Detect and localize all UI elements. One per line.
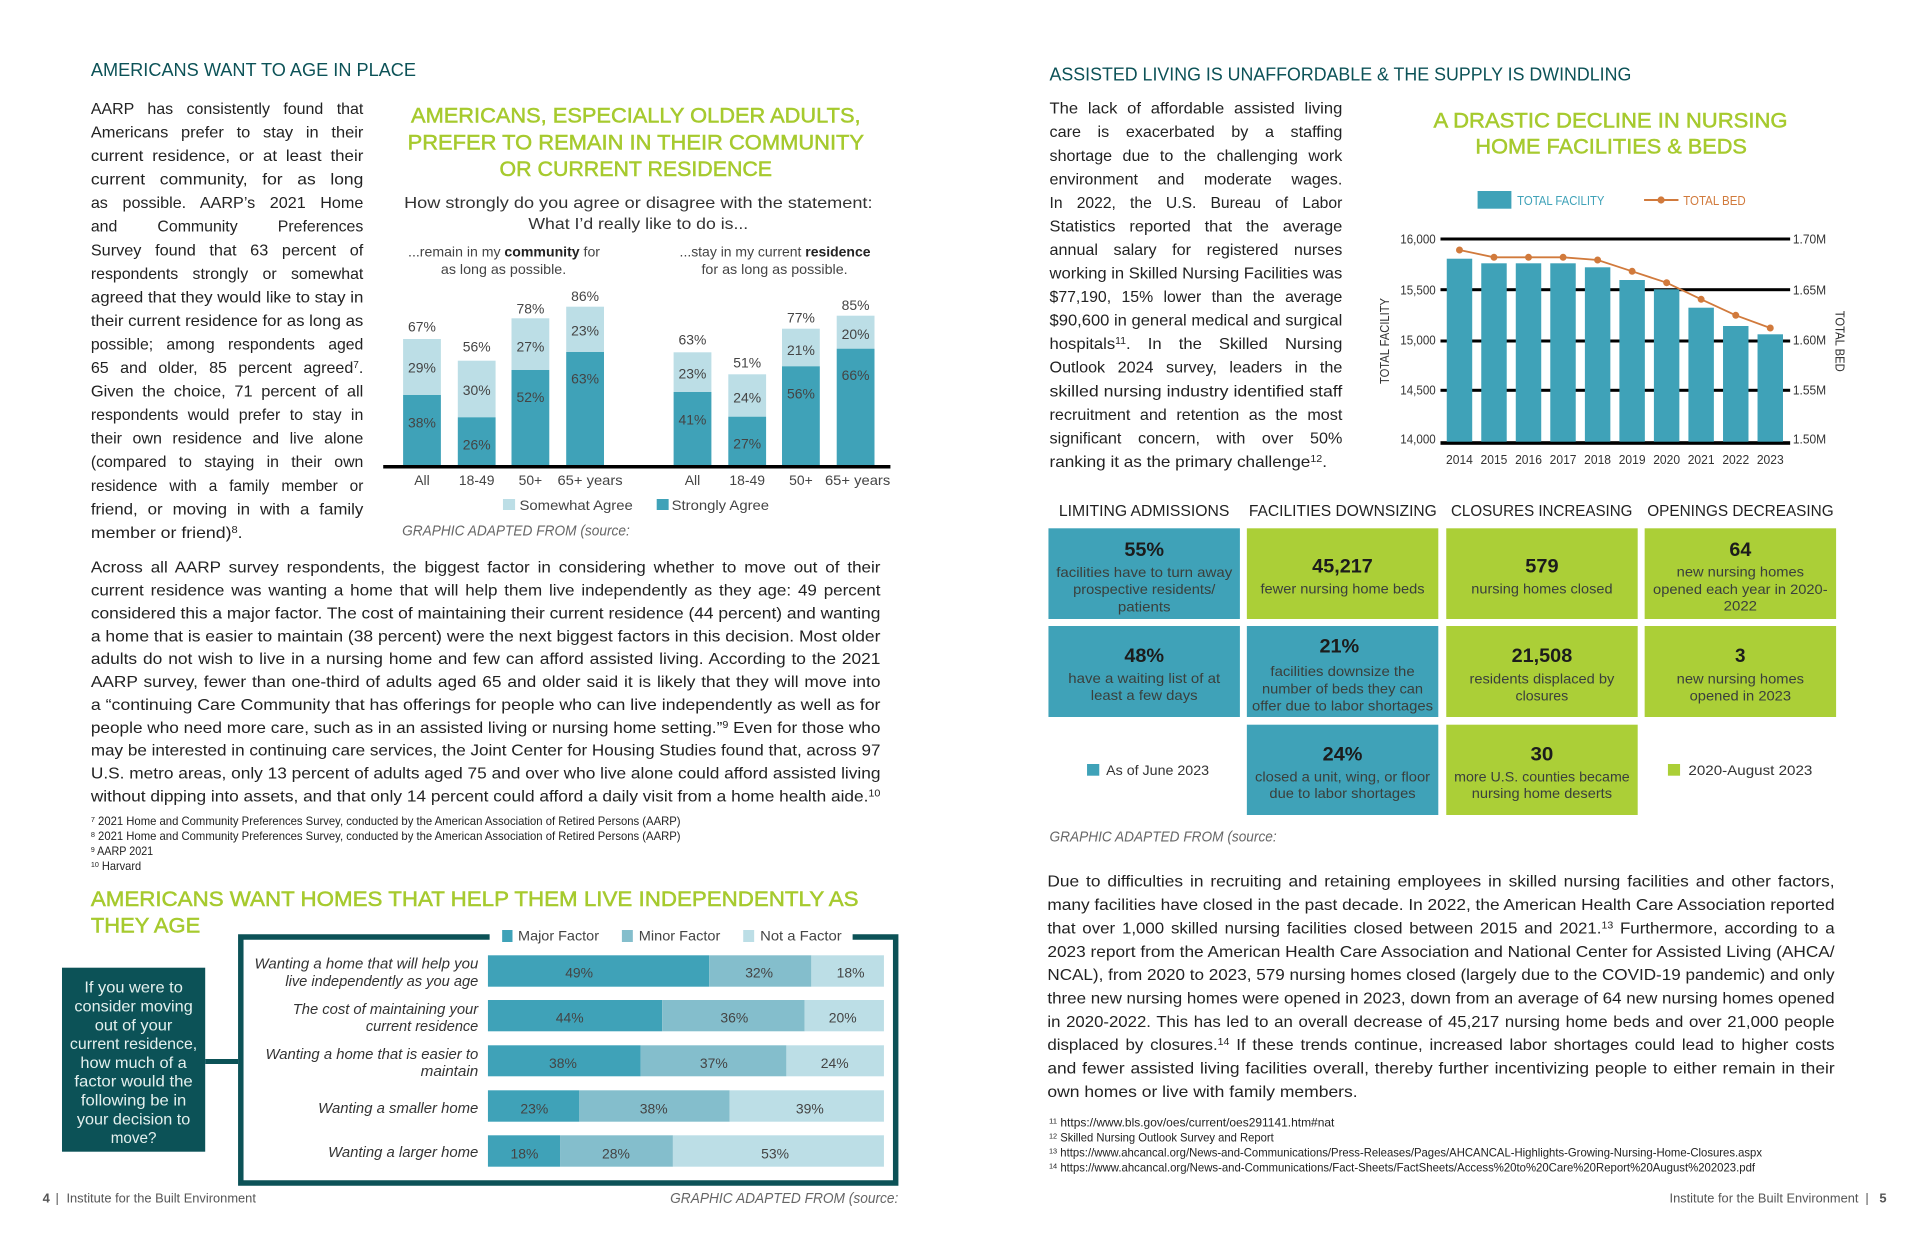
column headers: impact categories: FACILITIES DOWNSIZING [1249,503,1437,520]
text block: biggest factor paragraph: AARP survey, fewer than one-third of adults aged 65 and older said it is likely that they will move into [91,674,881,691]
callout: survey question box: factor would the [74,1074,193,1091]
text block: AARP intro paragraph: their own residence and live alone [91,431,363,448]
footnotes 7 to 10: AARP 2021 [95,846,153,858]
subheading: remain in my community [408,245,601,277]
footnotes 11 to 14 [1049,1116,1762,1174]
text block: closures paragraph: 13 [1601,920,1614,931]
combo chart: nursing facilities and beds: 2015 [1481,453,1507,467]
row: larger home [328,1135,884,1167]
subheading: remain in my community: as long as possible. [441,262,566,277]
row: larger home: 53% [761,1145,789,1161]
column headers: impact categories: OPENINGS DECREASING [1647,503,1834,520]
stacked bar chart: remain in community or residence: 63% [571,371,599,387]
stat card: 21%: number of beds they can [1262,680,1423,696]
text block: AARP intro paragraph: 8 [232,525,238,536]
text block: biggest factor paragraph: 10 [868,788,881,799]
text block: AARP intro paragraph: Survey found that 63 percent of [91,242,364,259]
footer: page 5: Institute for the Built Environment [1670,1191,1859,1206]
text block: staffing shortage paragraph: Outlook 2024 survey, leaders in the [1050,360,1342,377]
stat card: 21,508: closures [1516,687,1568,703]
stat card: 21%: 21% [1319,636,1359,657]
callout: survey question box [62,968,205,1152]
text block: staffing shortage paragraph: Statistics reported that the average [1050,218,1342,235]
stat card: 3: opened in 2023 [1690,687,1791,703]
text block: AARP intro paragraph: current residence, or at least their [91,148,364,165]
footnotes 11 to 14: 14 [1049,1161,1057,1170]
stat card: 48% [1048,626,1240,717]
stat card: 30: 30 [1530,745,1553,766]
text block: staffing shortage paragraph: significant concern, with over 50% [1050,430,1342,447]
text block: AARP intro paragraph: possible; among respondents aged [91,336,363,354]
text block: AARP intro paragraph: (compared to staying in their own [91,454,363,471]
callout: survey question box: following be in [81,1092,186,1110]
text block: closures paragraph: many facilities have closed in the past decade. In 2022, the American Health Care Association reported [1047,897,1835,914]
combo chart: nursing facilities and beds: 2022 [1722,453,1749,467]
footnotes 11 to 14: https://www.bls.gov/oes/current/oes291141.htm#nat [1057,1117,1335,1129]
survey question [404,195,873,233]
row: live independently: 49% [565,964,593,980]
text block: biggest factor paragraph: Across all AARP survey respondents, the biggest factor in considering whether to move out of their [91,560,881,577]
footer: page 4: | [56,1191,59,1206]
row: cost of maintaining [293,1000,884,1035]
footnotes 7 to 10 [91,815,681,873]
stacked bar chart: remain in community or residence: 78% [516,301,544,317]
subheading: stay in my current residence: ...stay in my current residence [680,245,871,260]
stacked bar chart: remain in community or residence: 24% [733,389,761,405]
combo chart: nursing facilities and beds: 14,000 [1400,432,1436,447]
stat card: 579: 579 [1525,556,1559,577]
stacked bar chart: remain in community or residence [383,288,890,488]
text block: closures paragraph: own homes or live with family members. [1047,1084,1358,1101]
legend: agreement: Somewhat Agree [519,497,633,513]
combo chart: nursing facilities and beds: 1.55M [1793,383,1826,398]
stat card: 55%: facilities have to turn away [1056,564,1232,580]
footnotes 7 to 10: 2021 Home and Community Preferences Survey, conducted by the American Association of Retired Persons (AARP) [95,816,681,828]
column headers: impact categories [1059,503,1834,520]
combo chart: nursing facilities and beds: 2016 [1515,453,1542,467]
text block: biggest factor paragraph: considered this a major factor. The cost of maintaining their current residence (44 percent) and wanting [91,605,880,622]
text block: staffing shortage paragraph: . [1322,454,1327,471]
text block: staffing shortage paragraph: working in Skilled Nursing Facilities was [1049,265,1342,283]
source note: chart 1: GRAPHIC ADAPTED FROM (source: [402,524,630,540]
combo chart: nursing facilities and beds: 1.65M [1793,283,1826,298]
chart title: homes that help them live independently: AMERICANS WANT HOMES THAT HELP THEM LIVE INDEPENDENTLY AS [91,888,859,911]
legend: total facility and total bed [1478,191,1746,209]
text block: closures paragraph: NCAL), from 2020 to 2023, 579 nursing homes closed (largely due to the COVID-19 pandemic) and only [1047,967,1835,984]
stacked bar chart: remain in community or residence: 56% [787,386,815,402]
stat card: 24%: closed a unit, wing, or floor [1255,768,1430,784]
footnotes 7 to 10: 10 [91,860,99,869]
heading: assisted living is unaffordable: ASSISTED LIVING IS UNAFFORDABLE & THE SUPPLY IS DWINDLING [1050,64,1631,85]
stacked bar chart: remain in community or residence: 50+ [789,472,813,488]
stacked bar chart: remain in community or residence: 18-49 [729,472,765,488]
text block: closures paragraph: Furthermore, according to a [1613,920,1835,937]
row: cost of maintaining: current residence [366,1019,478,1035]
text block: biggest factor paragraph: without dipping into assets, and that only 14 percent could afford a daily visit from a home health aide. [91,788,806,805]
stat card: 21,508 [1446,626,1638,717]
row: easier to maintain: Wanting a home that is easier to [265,1047,478,1063]
text block: staffing shortage paragraph: $77,190, 15% lower than the average [1050,289,1342,306]
footnotes 11 to 14: 11 [1049,1116,1057,1125]
text block: AARP intro paragraph: as possible. AARP’s 2021 Home [91,195,363,212]
callout: survey question box: your decision to [77,1111,190,1128]
stacked bar chart: remain in community or residence: 66% [842,367,870,383]
subheading: stay in my current residence [680,245,871,277]
text block: biggest factor paragraph: 9 [722,720,729,731]
stacked bar chart: remain in community or residence: 38% [408,414,436,430]
text block: AARP intro paragraph: current community, for as long [91,172,363,189]
text block: staffing shortage paragraph: skilled nursing industry identified staff [1050,383,1343,400]
text block: staffing shortage paragraph: environment and moderate wages. [1050,171,1342,188]
stat card: 24%: 24% [1323,745,1363,766]
stacked bar chart: remain in community or residence: 30% [463,382,491,398]
chart title: drastic decline [1434,109,1788,159]
row: smaller home: 23% [520,1100,548,1116]
text block: AARP intro paragraph: respondents strongly or somewhat [91,266,364,283]
stat card: 45,217 [1247,528,1438,619]
stat card: 24%: due to labor shortages [1269,785,1416,801]
stacked bar chart: remain in community or residence: 67% [408,319,436,335]
row: smaller home: 38% [640,1100,668,1116]
stat card: 21%: offer due to labor shortages [1252,697,1433,713]
text block: closures paragraph: three new nursing homes were opened in 2023, down from an average of 64 new nursing homes opened [1047,990,1835,1008]
text block: biggest factor paragraph: Even for those who [728,720,881,737]
text block: biggest factor paragraph: a home that is easier to maintain (38 percent) were the next biggest factors in this decision. Most older [91,628,881,645]
text block: AARP intro paragraph: AARP has consistently found that [91,101,364,118]
row: live independently [255,955,884,990]
legend: factor types: Not a Factor [760,927,842,944]
text block: closures paragraph [1047,874,1835,1101]
footnotes 7 to 10: 7 [91,815,95,824]
stat card: 55%: prospective residents/ [1073,581,1215,597]
callout: survey question box: out of your [95,1017,172,1034]
text block: closures paragraph: that over 1,000 skilled nursing facilities closed between 2015 and 2021. [1047,920,1569,937]
row: live independently: Wanting a home that will help you [255,957,478,973]
text block: AARP intro paragraph: agreed that they would like to stay in [91,289,363,306]
stacked bar chart: remain in community or residence: 27% [733,436,761,452]
text block: AARP intro paragraph: . [238,525,243,542]
chart title: prefer to remain: PREFER TO REMAIN IN THEIR COMMUNITY [408,131,864,154]
text block: closures paragraph: displaced by closures. [1047,1037,1208,1054]
row: cost of maintaining: 36% [720,1009,748,1025]
combo chart: nursing facilities and beds: 16,000 [1400,232,1436,247]
combo chart: nursing facilities and beds: 2023 [1757,453,1784,467]
combo chart: nursing facilities and beds [1378,232,1847,467]
text block: AARP intro paragraph [91,101,364,542]
text block: staffing shortage paragraph: The lack of affordable assisted living [1050,101,1342,118]
stacked bar chart: remain in community or residence: 23% [571,322,599,338]
survey question: What I’d really like to do is... [528,216,748,233]
text block: staffing shortage paragraph: ranking it as the primary challenge [1050,454,1292,471]
combo chart: nursing facilities and beds: 1.60M [1793,333,1826,348]
chart title: prefer to remain: AMERICANS, ESPECIALLY OLDER ADULTS, [411,105,861,128]
text block: closures paragraph: and fewer assisted living facilities overall, thereby further incentivizing people to either remain in their [1047,1061,1835,1078]
legend: agreement: Strongly Agree [672,497,769,513]
footnotes 11 to 14: https://www.ahcancal.org/News-and-Communications/Fact-Sheets/FactSheets/Access%20to%20Care%20Report%20August%202023.pdf [1057,1162,1756,1174]
text block: AARP intro paragraph: 65 and older, 85 percent agreed [91,360,351,377]
legend: factor types: Minor Factor [639,927,721,944]
combo chart: nursing facilities and beds: 2014 [1446,453,1473,467]
stat card: 64: 2022 [1724,598,1757,614]
combo chart: nursing facilities and beds: 2019 [1619,453,1646,467]
stat card: 55% [1048,528,1240,619]
combo chart: nursing facilities and beds: 2018 [1584,453,1611,467]
row: larger home: Wanting a larger home [328,1145,478,1161]
row: larger home: 28% [602,1145,630,1161]
row: smaller home: 39% [796,1100,824,1116]
panel frame: factors chart [241,937,896,1183]
combo chart: nursing facilities and beds: 2020 [1653,453,1680,467]
stat card: 45,217: fewer nursing home beds [1260,581,1425,597]
subheading: remain in my community: ...remain in my community for [408,245,601,260]
text block: closures paragraph: in 2020-2022. This has led to an overall decrease of 45,217 nursing home beds and over 21,000 people [1047,1014,1835,1031]
legend: total facility and total bed: TOTAL BED [1683,193,1746,208]
footer: page 5: 5 [1879,1191,1887,1206]
stat card: 21,508: 21,508 [1512,646,1572,667]
stacked bar chart: remain in community or residence: 56% [463,339,491,355]
row: smaller home [318,1090,884,1122]
callout: survey question box: move? [111,1130,157,1147]
row: easier to maintain: 38% [549,1055,577,1071]
combo chart: nursing facilities and beds: 2017 [1550,453,1577,467]
stacked bar chart: remain in community or residence: 50+ [519,472,542,488]
footnotes 7 to 10: 9 [91,845,95,854]
stat card: 21% [1247,626,1438,717]
text block: closures paragraph: 14 [1218,1037,1230,1048]
text block: AARP intro paragraph: their current residence for as long as [91,313,363,330]
text block: AARP intro paragraph: member or friend) [91,525,217,542]
text block: biggest factor paragraph: may be interested in continuing care services, the Joint Center for Housing Studies found that, across 97 [91,743,881,760]
text block: staffing shortage paragraph: $90,600 in general medical and surgical [1050,313,1342,330]
stat card: 30: nursing home deserts [1472,785,1612,801]
footnotes 7 to 10: 8 [91,830,95,839]
row: easier to maintain: maintain [421,1064,478,1080]
footer: page 4: 4 [43,1191,51,1206]
footnotes 11 to 14: Skilled Nursing Outlook Survey and Report [1057,1132,1275,1144]
stacked bar chart: remain in community or residence: 85% [842,297,870,313]
row: live independently: 32% [745,964,773,980]
combo chart: nursing facilities and beds: 15,500 [1400,283,1436,298]
stacked bar chart: remain in community or residence: All [685,472,700,488]
combo chart: nursing facilities and beds: 1.50M [1793,432,1826,447]
legend: factor types: Major Factor [518,927,599,944]
text block: staffing shortage paragraph: In 2022, the U.S. Bureau of Labor [1050,195,1343,212]
chart title: drastic decline: A DRASTIC DECLINE IN NURSING [1434,109,1788,132]
column headers: impact categories: CLOSURES INCREASING [1451,503,1632,520]
combo chart: nursing facilities and beds: 1.70M [1793,232,1826,247]
stat card: 48%: have a waiting list of at [1068,670,1220,686]
chart title: homes that help them live independently [91,888,859,938]
subheading: stay in my current residence: for as long as possible. [701,262,848,277]
column headers: impact categories: LIMITING ADMISSIONS [1059,503,1229,520]
text block: biggest factor paragraph: current residence was wanting a home that will help them live independently as they age: 49 percent [91,583,881,600]
combo chart: nursing facilities and beds: TOTAL FACILITY [1378,297,1392,384]
row: easier to maintain [265,1045,884,1080]
stat card: 21%: facilities downsize the [1270,663,1415,679]
stat card: 579 [1446,528,1638,619]
legend: total facility and total bed: TOTAL FACILITY [1517,193,1605,208]
callout: survey question box: If you were to [84,980,183,997]
stat card: 64: opened each year in 2020- [1653,581,1828,597]
stat card: 21,508: residents displaced by [1469,670,1614,686]
text block: closures paragraph: Due to difficulties in recruiting and retaining employees in skilled nursing facilities and other factors, [1047,874,1835,891]
source note: factors chart: GRAPHIC ADAPTED FROM (source: [670,1191,898,1207]
stacked bar chart: remain in community or residence: 77% [787,310,815,326]
text block: staffing shortage paragraph: 11 [1115,336,1126,347]
row: smaller home: Wanting a smaller home [318,1101,478,1117]
legend: factor types [502,927,842,944]
stacked bar chart: remain in community or residence: 27% [516,338,544,354]
stat card: 48%: least a few days [1091,687,1198,703]
text block: closures paragraph: 2023 report from the American Health Care Association and National Center for Assisted Living (AHCA/ [1047,944,1835,961]
text block: AARP intro paragraph: residence with a family member or [91,478,364,495]
row: easier to maintain: 24% [821,1055,849,1071]
stat card: 30: more U.S. counties became [1454,768,1630,784]
legend: agreement [503,497,769,513]
text block: biggest factor paragraph [90,560,881,805]
panel: right page [1047,64,1887,1206]
combo chart: nursing facilities and beds: 2021 [1688,453,1715,467]
footnotes 7 to 10: Harvard [99,861,141,873]
stacked bar chart: remain in community or residence: 52% [516,389,544,405]
text block: staffing shortage paragraph [1049,101,1343,471]
stacked bar chart: remain in community or residence: 63% [679,332,706,348]
text block: biggest factor paragraph: U.S. metro areas, only 13 percent of adults aged 75 and over who live alone could afford assisted living [91,765,880,783]
stat card: 3: 3 [1735,646,1746,667]
stat card: 64: new nursing homes [1677,564,1804,580]
stat card: 64: 64 [1729,540,1752,561]
row: live independently: 18% [837,964,865,980]
stacked bar chart: remain in community or residence: 21% [787,342,815,358]
stat card: 579: nursing homes closed [1471,581,1613,597]
stat card: 3 [1645,626,1836,717]
stacked bar chart: remain in community or residence: 86% [571,288,599,304]
stacked bar chart: remain in community or residence: 23% [679,366,706,382]
stacked bar chart: remain in community or residence: 18-49 [459,472,495,488]
combo chart: nursing facilities and beds: TOTAL BED [1833,311,1847,372]
chart title: drastic decline: HOME FACILITIES & BEDS [1475,136,1747,159]
text block: AARP intro paragraph: 7 [353,360,359,371]
row: cost of maintaining: 20% [829,1009,857,1025]
row: cost of maintaining: 44% [556,1009,584,1025]
text block: AARP intro paragraph: respondents would prefer to stay in [91,407,363,424]
footnotes 11 to 14: 12 [1049,1131,1057,1140]
text block: staffing shortage paragraph: shortage due to the challenging work [1050,148,1342,165]
text block: staffing shortage paragraph: 12 [1310,454,1323,465]
text block: biggest factor paragraph: adults do not wish to live in a nursing home and few can afford assisted living. According to the 2021 [91,651,881,668]
legend: 2020-August 2023: 2020-August 2023 [1688,762,1813,778]
stat card: 3: new nursing homes [1677,670,1804,686]
text block: staffing shortage paragraph: hospitals [1050,336,1112,353]
footnotes 11 to 14: https://www.ahcancal.org/News-and-Communications/Press-Releases/Pages/AHCANCAL-Highlights-Growing-Nursing-Home-Closures.aspx [1057,1147,1762,1159]
callout: survey question box: current residence, [70,1036,197,1053]
source note: stat cards: GRAPHIC ADAPTED FROM (source: [1050,830,1277,846]
stat card: 55%: patients [1118,598,1171,614]
legend: as of June 2023: As of June 2023 [1106,762,1209,778]
text block: AARP intro paragraph: friend, or moving in with a family [91,501,363,518]
row: live independently: live independently as you age [285,974,478,990]
stat card: 55%: 55% [1124,540,1164,561]
row: larger home: 18% [511,1145,538,1161]
stacked bar chart: remain in community or residence: 29% [408,359,436,375]
text block: AARP intro paragraph: Given the choice, 71 percent of all [91,384,363,401]
stat card: 24% [1247,725,1438,815]
text block: biggest factor paragraph: a “continuing Care Community that has offerings for people who can live independently as well as for [91,697,881,714]
text block: staffing shortage paragraph: . In the Skilled Nursing [1126,336,1342,353]
footnotes 11 to 14: 13 [1049,1146,1057,1155]
callout: survey question box: how much of a [80,1055,187,1072]
text block: AARP intro paragraph: . [359,360,363,377]
stacked bar chart: remain in community or residence: 26% [463,436,491,452]
stat card: 30 [1446,725,1638,815]
callout: survey question box: consider moving [74,998,193,1016]
connector: callout to frame [205,1059,238,1064]
heading: Americans want to age in place: AMERICANS WANT TO AGE IN PLACE [91,59,416,80]
stacked bar chart: remain in community or residence: 20% [842,326,870,342]
stacked bar chart: remain in community or residence: 65+ years [557,472,623,488]
text block: biggest factor paragraph: people who need more care, such as in an assisted living or nursing home setting.” [91,720,674,737]
text block: staffing shortage paragraph: care is exacerbated by a staffing [1050,124,1342,141]
stat card: 48%: 48% [1124,646,1164,667]
footer: page 4: Institute for the Built Environment [66,1191,256,1206]
stacked bar chart: remain in community or residence: All [414,472,430,488]
stat card: 64 [1645,528,1836,619]
text block: staffing shortage paragraph: recruitment and retention as the most [1050,407,1343,424]
footer: page 5: | [1865,1191,1869,1206]
stacked bar chart: remain in community or residence: 65+ years [825,472,890,488]
chart title: homes that help them live independently: THEY AGE [91,915,200,938]
stat card: 45,217: 45,217 [1312,556,1373,577]
text block: closures paragraph: If these trends continue, increased labor shortages could lead to higher costs [1229,1037,1835,1054]
text block: AARP intro paragraph: Americans prefer to stay in their [91,124,364,142]
panel: left page [43,59,898,1207]
survey question: How strongly do you agree or disagree with the statement: [404,195,873,212]
combo chart: nursing facilities and beds: 15,000 [1400,333,1436,348]
footnotes 7 to 10: 2021 Home and Community Preferences Survey, conducted by the American Association of Retired Persons (AARP) [95,831,681,843]
combo chart: nursing facilities and beds: 14,500 [1400,383,1436,398]
row: cost of maintaining: The cost of maintaining your [293,1002,479,1018]
chart title: prefer to remain [408,105,864,181]
text block: AARP intro paragraph: and Community Preferences [91,219,363,236]
stacked bar chart: remain in community or residence: 41% [679,411,706,427]
text block: staffing shortage paragraph: annual salary for registered nurses [1050,242,1342,259]
stacked bar chart: remain in community or residence: 51% [733,354,761,370]
row: easier to maintain: 37% [700,1055,728,1071]
chart title: prefer to remain: OR CURRENT RESIDENCE [500,158,772,181]
